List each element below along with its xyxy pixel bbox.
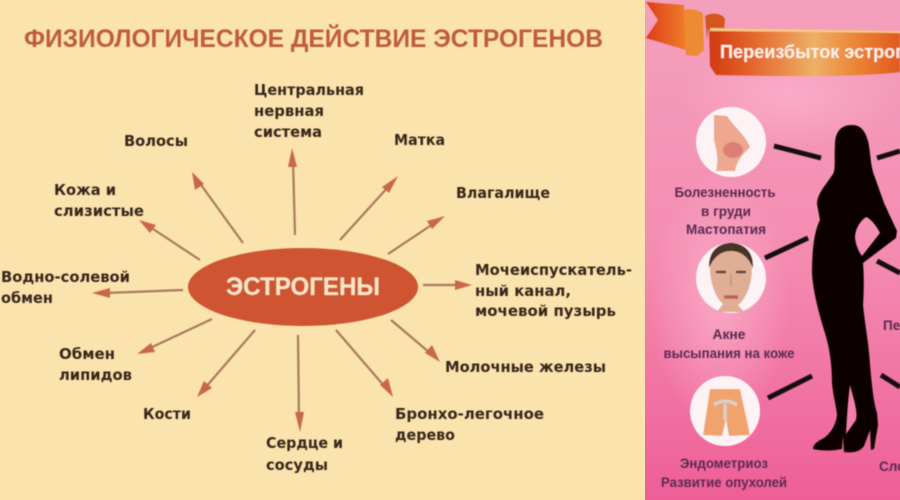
- text: breast pain: Мастопатия: [686, 222, 766, 237]
- text: breast pain: в груди: [701, 204, 751, 219]
- effect labels: дерево: [395, 426, 455, 444]
- effect labels: система: [254, 123, 322, 141]
- text: cropped right labels: [879, 318, 900, 474]
- text: acne: Акне: [712, 327, 746, 342]
- effect labels: Водно-солевой: [1, 268, 130, 286]
- effect labels: Мочеиспускатель-: [475, 261, 632, 279]
- icon: face: [696, 243, 766, 313]
- central ellipse: estrogens: ЭСТРОГЕНЫ: [226, 273, 380, 301]
- effect labels: мочевой пузырь: [475, 302, 616, 320]
- icon: uterus: [690, 376, 760, 446]
- text: acne: [664, 327, 795, 361]
- text: breast pain: Болезненность: [674, 185, 776, 200]
- effect labels: Матка: [394, 131, 445, 149]
- effect labels: Обмен: [59, 345, 115, 363]
- central ellipse: estrogens: [188, 248, 418, 326]
- effect labels: Кожа и: [54, 181, 116, 199]
- effect labels: слизистые: [54, 202, 144, 220]
- effect labels: Центральная: [254, 81, 364, 99]
- connector lines: [765, 146, 900, 398]
- panel: physiological action of estrogens: [0, 0, 646, 500]
- gap between the legs: [846, 385, 857, 434]
- title: ФИЗИОЛОГИЧЕСКОЕ ДЕЙСТВИЕ ЭСТРОГЕНОВ: [24, 23, 603, 53]
- panel: estrogen excess: [645, 0, 900, 500]
- effect labels: Молочные железы: [445, 358, 606, 376]
- text: cropped right labels: Пе: [883, 318, 900, 333]
- effect labels: нервная: [254, 102, 324, 120]
- text: endometriosis: Развитие опухолей: [661, 475, 787, 490]
- effect labels: [1, 81, 632, 474]
- effect labels: липидов: [59, 366, 132, 384]
- effect labels: ный канал,: [475, 282, 571, 300]
- effect labels: Сердце и: [266, 434, 343, 452]
- silhouette of a woman: [812, 125, 897, 452]
- text: endometriosis: [661, 456, 787, 490]
- effect labels: обмен: [1, 289, 53, 307]
- text: acne: высыпания на коже: [664, 346, 795, 361]
- effect labels: Волосы: [124, 132, 188, 150]
- icon: breast: [696, 107, 766, 177]
- effect labels: Кости: [143, 405, 191, 423]
- effect labels: сосуды: [266, 456, 328, 474]
- text: endometriosis: Эндометриоз: [680, 456, 768, 471]
- text: breast pain: [674, 185, 776, 237]
- effect labels: Бронхо-легочное: [395, 405, 544, 423]
- arrows radiating from the ellipse: [92, 148, 472, 432]
- ribbon banner: [646, 2, 900, 76]
- effect labels: Влагалище: [456, 184, 550, 202]
